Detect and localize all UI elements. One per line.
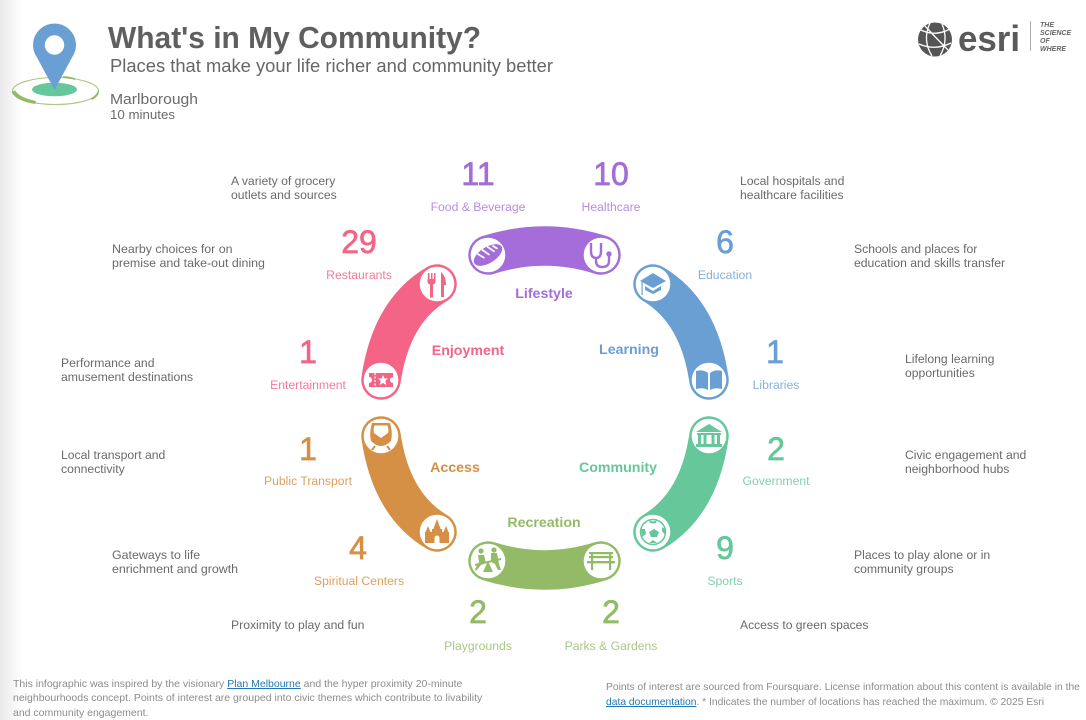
description: public transport: connectivity: [61, 462, 126, 476]
stat: sports: Sports: [707, 574, 743, 588]
icon: soccer ball: [640, 520, 666, 544]
description: government: Civic engagement and: [905, 448, 1026, 462]
icon: ticket: [369, 373, 393, 387]
stat: libraries: 1: [766, 334, 784, 370]
stat: libraries: Libraries: [753, 378, 799, 392]
icon: train: [370, 423, 392, 450]
description: food and beverage: A variety of grocery: [231, 174, 336, 188]
stat: education: 6: [716, 224, 734, 260]
description: parks and gardens: Access to green spaces: [740, 618, 868, 632]
esri logo: WHERE: [1040, 46, 1066, 53]
esri logo: esri: [958, 18, 1020, 59]
description: education: education and skills transfer: [854, 256, 1005, 270]
panel: access: [364, 419, 480, 549]
footer note: data source: Points of interest are sourced from Foursquare. License information about this content is available in the: [606, 682, 1080, 693]
stat: food and beverage: 11: [461, 156, 495, 192]
esri logo: [918, 18, 1071, 59]
stat: spiritual centers: [314, 530, 404, 588]
location name: Marlborough: [110, 91, 198, 108]
stat: entertainment: 1: [299, 334, 317, 370]
category label: access: Access: [430, 460, 480, 476]
description: sports: community groups: [854, 562, 954, 576]
panel: learning: [599, 267, 726, 397]
stat: government: [742, 431, 810, 488]
description: education: Schools and places for: [854, 242, 977, 256]
description: food and beverage: outlets and sources: [231, 188, 337, 202]
stat: education: Education: [698, 268, 752, 282]
stat: restaurants: 29: [341, 224, 377, 260]
stat: spiritual centers: Spiritual Centers: [314, 574, 404, 588]
category label: enjoyment: Enjoyment: [432, 343, 505, 359]
travel time: 10 minutes: [110, 107, 176, 122]
stat: education: [698, 224, 752, 282]
esri logo: THE: [1040, 22, 1054, 29]
stat: entertainment: Entertainment: [270, 378, 347, 392]
footer note: data source: . * Indicates the number of locations has reached the maximum. © 2025 Esri: [696, 697, 1044, 708]
stat: spiritual centers: 4: [349, 530, 367, 566]
description: healthcare: healthcare facilities: [740, 188, 844, 202]
description: restaurants: Nearby choices for on: [112, 242, 233, 256]
icon: civic building: [696, 424, 722, 447]
stat: food and beverage: Food & Beverage: [431, 200, 526, 214]
stat: food and beverage: [431, 156, 526, 214]
description: spiritual centers: Gateways to life: [112, 548, 200, 562]
stat: parks and gardens: 2: [602, 594, 620, 630]
panel: enjoyment: [364, 267, 505, 397]
icon: park bench: [587, 552, 615, 570]
description: healthcare: Local hospitals and: [740, 174, 844, 188]
footer note: inspiration: neighbourhoods concept. Points of interest are grouped into civic themes which contribute to livability: [13, 692, 483, 704]
panel: recreation: [471, 515, 618, 578]
icon: seesaw: [475, 547, 501, 572]
description: government: neighborhood hubs: [905, 462, 1009, 476]
category label: community: Community: [579, 460, 657, 476]
stat: public transport: Public Transport: [264, 474, 353, 488]
icon: church: [425, 519, 449, 543]
esri logo: SCIENCE: [1040, 30, 1071, 37]
panel: community: [579, 419, 726, 549]
footer note: inspiration: This infographic was inspired by the visionary: [13, 678, 227, 690]
icon: bread: [470, 240, 506, 270]
icon: location pin with ring: [12, 24, 99, 104]
description: spiritual centers: enrichment and growth: [112, 562, 238, 576]
stat: restaurants: Restaurants: [326, 268, 392, 282]
stat: parks and gardens: Parks & Gardens: [565, 639, 657, 653]
category label: lifestyle: Lifestyle: [515, 286, 573, 302]
stat: libraries: [753, 334, 799, 392]
subtitle: Places that make your life richer and community better: [110, 56, 553, 76]
description: entertainment: Performance and: [61, 356, 154, 370]
category label: recreation: Recreation: [507, 515, 581, 531]
stat: government: Government: [742, 474, 810, 488]
footer note: inspiration: and community engagement.: [13, 707, 148, 719]
description: playgrounds: Proximity to play and fun: [231, 618, 364, 632]
footer note: inspiration: Plan Melbourne and the hyper proximity 20-minute: [227, 678, 462, 690]
stat: restaurants: [326, 224, 392, 282]
footer note: data source: data documentation: [606, 697, 697, 708]
stat: healthcare: Healthcare: [582, 200, 641, 214]
panel: lifestyle: [470, 238, 618, 302]
description: public transport: Local transport and: [61, 448, 165, 462]
stat: playgrounds: Playgrounds: [444, 639, 512, 653]
stat: entertainment: [270, 334, 347, 392]
icon: open book: [696, 370, 722, 390]
stat: sports: [707, 530, 743, 588]
title: What's in My Community?: [108, 20, 481, 55]
icon: graduation cap: [640, 273, 666, 295]
category label: learning: Learning: [599, 342, 659, 358]
stat: public transport: [264, 431, 353, 488]
description: entertainment: amusement destinations: [61, 370, 193, 384]
icon: fork and knife: [428, 272, 446, 298]
description: libraries: Lifelong learning: [905, 352, 994, 366]
stat: government: 2: [767, 431, 785, 467]
icon: stethoscope: [591, 243, 612, 267]
stat: playgrounds: 2: [469, 594, 487, 630]
esri logo: OF: [1040, 38, 1050, 45]
stat: healthcare: 10: [593, 156, 629, 192]
stat: sports: 9: [716, 530, 734, 566]
stat: parks and gardens: [565, 594, 657, 653]
stat: public transport: 1: [299, 431, 317, 467]
stat: playgrounds: [444, 594, 512, 653]
description: sports: Places to play alone or in: [854, 548, 990, 562]
stat: healthcare: [582, 156, 641, 214]
description: libraries: opportunities: [905, 366, 975, 380]
description: restaurants: premise and take-out dining: [112, 256, 265, 270]
